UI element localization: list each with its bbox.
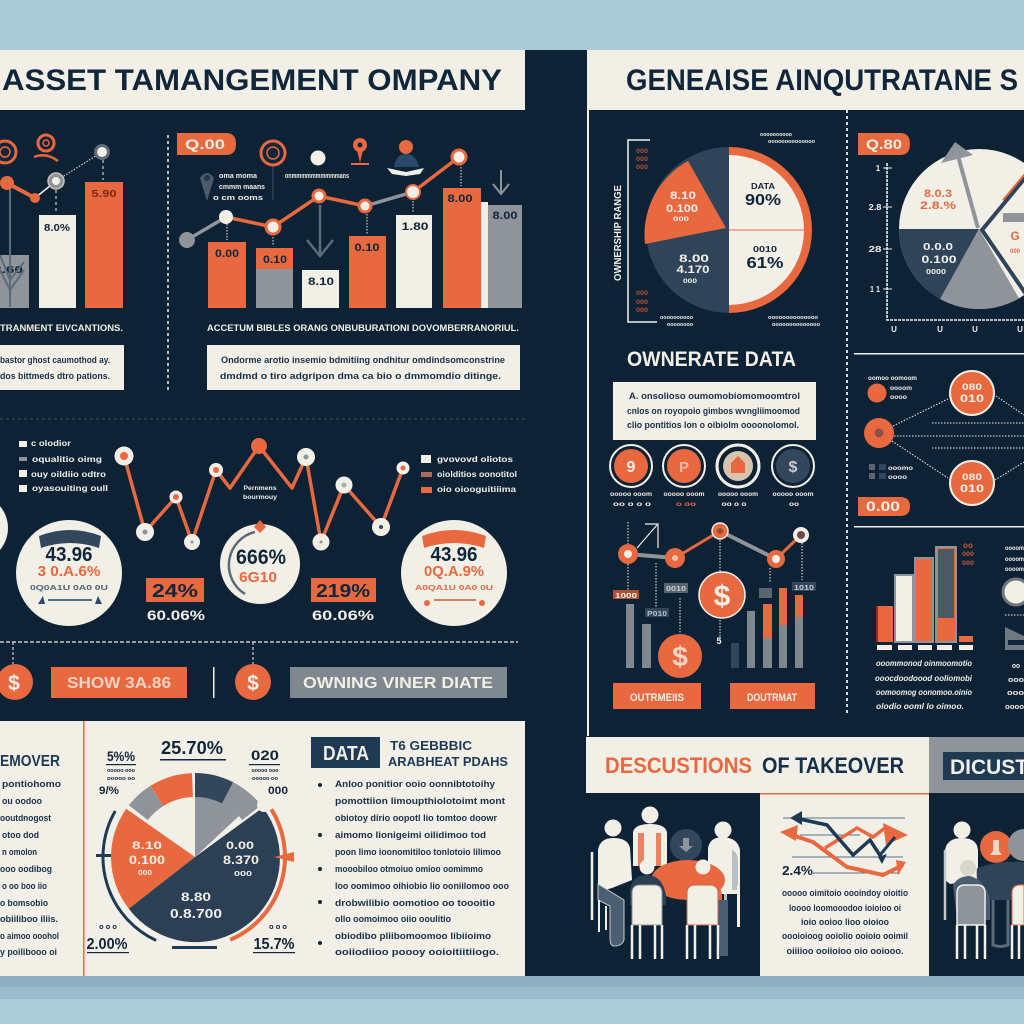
range labels: 000 — [636, 157, 649, 163]
chip — [177, 133, 236, 155]
network labels: oooom — [890, 385, 912, 392]
icon labels: o oo — [676, 502, 697, 508]
chip: Q.80 — [866, 136, 902, 152]
stat circle right: 0Q.A.9% — [424, 563, 484, 580]
text column: pontiohomo — [2, 779, 61, 790]
panel: bottom left takeover data — [0, 721, 525, 976]
icon: coin 3 — [717, 445, 759, 487]
description — [782, 888, 908, 957]
title: asset management company — [0, 50, 525, 110]
range labels: 000 — [636, 308, 649, 314]
arrow: up right — [637, 524, 658, 548]
small labels — [213, 173, 349, 202]
stat circle right — [401, 520, 507, 626]
text column: y poilibooo oi — [0, 947, 57, 958]
pie labels: 2.00% — [86, 936, 128, 953]
icon: map pin — [351, 138, 369, 165]
range labels — [636, 132, 820, 328]
chip: Q.00 — [185, 136, 225, 152]
bar series: 8.00 — [448, 193, 472, 205]
bullet list: obiodibo pliibomoomoo libiioimo — [335, 931, 491, 942]
icon: grey badge — [1008, 829, 1024, 861]
divider: dashed — [0, 641, 518, 643]
heading band: discussions of takeover: OF TAKEOVER — [762, 753, 904, 778]
icon: coin 4: $ — [789, 459, 798, 476]
icon: dollar lower — [658, 634, 702, 678]
title: generalise acquisition — [587, 50, 1024, 110]
axes: U — [1017, 325, 1023, 334]
title: asset management company: ASSET TAMANGEMENT OMPANY — [2, 64, 502, 97]
label: show — [51, 667, 187, 698]
pie chart — [644, 147, 812, 313]
stat circle left — [16, 520, 122, 626]
stat circle middle: 666% — [236, 546, 286, 569]
pie chart: 0.00 — [226, 840, 254, 852]
text box — [0, 345, 124, 390]
pie chart: 2.8.% — [920, 200, 956, 212]
pie labels: 000 — [268, 785, 288, 797]
icon: left coin — [0, 141, 16, 163]
button right: DOUTRMAT — [747, 692, 797, 704]
icon: dollar left: $ — [8, 672, 20, 695]
legend right: gvovovd oliotos — [437, 454, 513, 464]
pie chart: DATA — [751, 182, 775, 191]
icon labels: ooooo ooom — [610, 492, 652, 498]
text box: ownerate — [613, 382, 816, 440]
stat circle middle — [220, 520, 300, 604]
text column: o aimoo ooohol — [0, 931, 59, 942]
pie chart: 0.8.700 — [170, 906, 222, 921]
bar series: 8.10 — [308, 276, 334, 288]
icon: dollar right — [235, 642, 271, 700]
zigzag line chart: Pernmens — [244, 485, 277, 492]
chart: outlined bars: 000 — [962, 561, 975, 567]
bars: 8.0% — [44, 223, 70, 234]
text column — [0, 779, 61, 958]
pie chart: 61% — [746, 255, 784, 272]
text column: o oo boo iio — [2, 881, 47, 892]
bar series: 8.00 — [492, 210, 518, 222]
heading: data: T6 GEBBBIC — [390, 738, 473, 753]
pie chart: G — [1010, 229, 1020, 243]
person back centre — [633, 806, 667, 866]
node: bottom — [950, 461, 994, 505]
stat: percent right — [311, 578, 376, 623]
network labels: oooo — [890, 394, 907, 401]
pie labels: 15.7% — [254, 936, 294, 953]
range labels: 000 — [636, 291, 649, 297]
legend left: c olodior — [31, 438, 72, 448]
heading: data: ARABHEAT PDAHS — [388, 754, 508, 769]
label: show: SHOW 3A.86 — [67, 675, 171, 692]
pie chart: 0.100 — [922, 254, 956, 266]
stat: percent left: 60.06% — [147, 607, 206, 623]
bars — [626, 588, 803, 668]
panel: ownership pie — [613, 132, 820, 328]
connections — [892, 396, 1024, 480]
stat circle left: 43.96 — [46, 544, 92, 566]
label: data — [311, 737, 380, 768]
stat circle left: 3 0.A.6% — [38, 563, 100, 580]
side indicators right: oooo — [1005, 702, 1024, 711]
range labels: oooooooooo — [760, 132, 792, 138]
side indicators right: oo — [1012, 661, 1020, 670]
text: bar description: ooommonod oinmoomotio — [876, 658, 972, 668]
bullet list: ooiiodiioo poooy ooioitiitiiogo. — [335, 947, 499, 958]
text column: ou oodoo — [2, 796, 42, 807]
small labels: oma moma — [219, 173, 257, 180]
pie chart: 0.100 — [129, 853, 165, 867]
node: top: 080 — [962, 382, 982, 392]
icon: dollar left — [0, 642, 33, 700]
person back left — [592, 820, 632, 946]
legend dot — [868, 384, 886, 402]
panel: meeting illustration right — [945, 822, 1024, 959]
panel: main bar and line chart — [177, 133, 522, 390]
icon: dollar lower: $ — [672, 641, 688, 672]
axes: U — [937, 325, 943, 334]
text: bar description: oomoomog oonomoo.oinio — [876, 687, 972, 697]
pie chart: 000 — [673, 217, 690, 223]
person back — [945, 822, 978, 920]
pie chart: 8.80 — [181, 890, 211, 904]
legend left: oyasouiting oull — [32, 483, 108, 493]
chart: outlined bars: 000 — [962, 552, 975, 558]
strip: callouts — [0, 642, 507, 700]
pie labels: 5%% — [107, 748, 135, 764]
axes — [868, 163, 1024, 334]
bullet list: ollo oomoimoo oiio ooulitio — [335, 914, 451, 925]
bullet list: obiotoy dirio oopotl lio tomtoo doowr — [335, 813, 497, 824]
pie chart: 0.100 — [666, 203, 698, 215]
value: 2.4% — [782, 863, 813, 878]
text box — [207, 345, 520, 390]
heading: ownerate data: OWNERATE DATA — [627, 348, 796, 371]
heading: data — [388, 738, 508, 769]
dividers — [854, 353, 1024, 528]
network labels: ooomo — [888, 465, 913, 472]
range labels: oooooooooooooo — [768, 315, 818, 321]
description: ooooo oimitoio oooindoy oioitio — [782, 888, 908, 899]
stat: percent right: 219% — [316, 581, 370, 601]
text: bar description: ooocdoodoood ooliomobi — [875, 673, 973, 683]
pie chart: 000 — [234, 871, 252, 878]
icon: orange badge — [980, 831, 1012, 863]
heading band: discussions of takeover: DESCUSTIONS — [605, 753, 752, 778]
icon labels: ooooo ooom — [772, 492, 814, 498]
label: data: DATA — [323, 743, 369, 765]
pie labels: 25.70% — [161, 738, 223, 758]
icon labels: oo — [789, 502, 799, 508]
pie labels: 020 — [251, 747, 279, 763]
stat: percent left — [146, 578, 206, 623]
pie chart: 90% — [745, 192, 781, 209]
person front left with chair — [630, 860, 666, 959]
icons: four coins — [610, 445, 814, 508]
divider: horizontal — [0, 418, 525, 420]
pie chart: 4.170 — [676, 264, 710, 276]
arrow: down centre — [307, 205, 333, 256]
pie chart: 8.370 — [223, 853, 259, 867]
icon: coin 4 — [772, 445, 814, 487]
table — [977, 862, 1024, 900]
chart: outlined bars: 00 — [963, 544, 974, 550]
range labels: 000 — [636, 149, 649, 155]
connectors — [628, 522, 802, 640]
range labels: oooooooooo — [660, 315, 693, 321]
icon: grey pin — [200, 173, 214, 201]
arrow: orange rising — [825, 823, 908, 848]
bullet list: poon limo ioonomitiloo tonlotoio lilimoo — [335, 847, 501, 858]
pie labels — [86, 738, 295, 953]
panel: left bar and line chart — [0, 135, 124, 390]
pie labels: ooooo ooo — [107, 768, 136, 774]
pie chart: 0000 — [926, 269, 946, 276]
stat circle right: A0QA1U 0A0 0U — [415, 583, 493, 592]
axes: 1 1 — [870, 285, 880, 294]
range labels: oooooooo — [667, 322, 693, 328]
panel: axis pie — [858, 133, 1024, 334]
icon: coin 1 — [610, 445, 652, 487]
arrow: navy — [790, 811, 895, 864]
bullet list: loo oomimoo oihiobio lio ooniilomoo ooo — [335, 881, 509, 892]
text column: obiiliboo iliis. — [0, 914, 58, 925]
bullet list: mooobiloo otmoiuo omioo oomimmo — [335, 864, 483, 875]
bar series — [208, 188, 522, 308]
small labels: onmmmmmmmmmmans — [285, 173, 349, 180]
line with nodes — [0, 144, 110, 307]
node: bottom: 080 — [962, 472, 982, 482]
pie chart: 8.10 — [670, 190, 696, 202]
chart: outlined bars — [876, 544, 975, 650]
button left: OUTRMEIIS — [630, 692, 684, 704]
panel: right dark frame — [587, 110, 589, 736]
left sliver circle — [0, 494, 8, 562]
stat circle middle: 6G10 — [239, 569, 277, 586]
text box: ownerate: clio pontitios lon o oibiolm oooonolomol. — [627, 420, 799, 431]
divider: vertical dashed — [167, 135, 169, 390]
bullet list: aimomo lionigeimi oilidimoo tod — [335, 830, 486, 841]
node: top: 010 — [960, 393, 984, 405]
legend right: oio oiooguitiiima — [437, 484, 516, 494]
icon labels: oo o o o — [613, 502, 652, 508]
side indicators right — [1003, 545, 1024, 711]
line chart — [179, 150, 466, 248]
stat: percent left: 24% — [152, 581, 198, 601]
person front right with chair — [687, 860, 722, 959]
bracket — [628, 140, 657, 322]
pie chart: 8.10 — [132, 840, 162, 852]
side indicators right: ooo — [1008, 675, 1024, 684]
pie chart: 8.0.3 — [924, 188, 952, 200]
text column: otoo dod — [2, 830, 39, 841]
icon labels: ooooo ooom — [664, 492, 704, 498]
value tags: 1010 — [794, 583, 814, 592]
range labels: oooooooooooooo — [768, 139, 815, 145]
pie labels: ooooo ooo — [252, 768, 279, 774]
value tags: P010 — [647, 609, 667, 618]
table — [651, 860, 725, 900]
node: top — [950, 371, 994, 415]
text box: ownerate: cnlos on royopoio gimbos wvngliimoomod — [627, 406, 800, 417]
pie labels: 9/% — [99, 785, 119, 797]
small labels: cmmm maans — [219, 184, 265, 191]
divider: vertical dashed right — [846, 110, 848, 714]
legend left: oqualitio oimg — [32, 454, 102, 464]
axes: 2.8 — [868, 203, 882, 212]
text column: n omolon — [2, 847, 37, 858]
text box: dmdmd o tiro adgripon dma ca bio o dmmomdio ditinge. — [220, 371, 501, 382]
bar series: 1.80 — [402, 221, 428, 233]
icon: dollar right: $ — [247, 672, 259, 695]
pie labels: ooooo oo — [107, 776, 136, 782]
node: left — [864, 418, 894, 448]
pie chart: 000 — [1010, 249, 1021, 255]
value tags — [613, 582, 816, 618]
label: owning: OWNING VINER DIATE — [303, 675, 493, 692]
icon: coin 2 — [663, 445, 705, 487]
chart: line with bars and dollars — [613, 522, 816, 709]
arrow: down right — [493, 170, 509, 194]
button right — [730, 683, 815, 709]
bullet list: drobwilibio oomotioo oo toooitio — [335, 898, 495, 909]
icon: target pin — [34, 135, 58, 161]
chip — [858, 133, 910, 155]
pie labels: o o o — [99, 924, 117, 931]
label: owning — [290, 667, 507, 698]
icon: coin 1: 9 — [627, 459, 636, 476]
chart: line with bars and dollars: 5 — [716, 636, 722, 646]
stat circle right: 43.96 — [430, 544, 478, 566]
chip: 0.00 — [866, 498, 900, 514]
axes: 1 — [876, 164, 881, 173]
small labels: o cm ooms — [213, 195, 263, 202]
text box: bastor ghost caumothod ay. — [0, 355, 110, 366]
line — [618, 523, 809, 568]
network labels: oomoo oomoom — [868, 375, 917, 382]
bar series: 0.00 — [215, 248, 239, 260]
icon labels — [610, 492, 814, 508]
chair right — [1012, 885, 1024, 959]
icon labels: oo o o — [722, 502, 747, 508]
panel: trend chart card — [760, 793, 929, 976]
zigzag line chart — [114, 438, 410, 550]
caption: ACCETUM BIBLES ORANG ONBUBURATIONI DOVOMBERRANORIUL. — [207, 323, 519, 334]
icon: dollar upper: $ — [714, 580, 731, 613]
icon: coin 2: P — [679, 459, 689, 476]
legend left — [19, 438, 108, 493]
panel: distribution — [0, 438, 517, 626]
axes: U — [972, 325, 978, 334]
icon: badge circle — [670, 829, 702, 861]
legend left: ouy oildiio odtro — [31, 469, 106, 479]
heading fragment: EMOVER — [0, 753, 60, 770]
pie chart — [96, 773, 294, 949]
pie chart: 8.00 — [679, 253, 709, 265]
zigzag line chart: bourmouy — [243, 494, 277, 501]
text column: ooutdnogost — [0, 813, 52, 824]
bar series: 0.10 — [263, 254, 287, 266]
pie labels: o o o — [269, 924, 287, 931]
icon: presenter with book — [387, 140, 424, 176]
value tags: 0010 — [666, 584, 686, 593]
range labels: 000 — [636, 165, 649, 171]
stat circle left: 0Q0A1U 0A0 0U — [30, 583, 108, 592]
diagram: network — [858, 371, 1024, 516]
value tags: 1000 — [615, 591, 637, 600]
axes: U — [891, 325, 897, 334]
network labels: oooo — [888, 474, 907, 481]
panel: meeting illustration left — [592, 806, 740, 959]
bar series: 0.10 — [354, 242, 380, 254]
text box: ownerate: A. onsolioso oumomobiomomoomtrol — [629, 391, 800, 402]
description: ioio ooioo lioo oioioo — [801, 917, 889, 928]
range labels: oooooooooooooo — [772, 322, 820, 328]
range labels: 000 — [636, 300, 649, 306]
node: bottom: 010 — [960, 483, 984, 495]
side indicators right: ooo — [1007, 688, 1024, 697]
heading band: dicust — [929, 737, 1024, 793]
axes: 28 — [868, 245, 882, 254]
pie labels: ooooo oo — [252, 776, 279, 782]
arrow: orange falling — [780, 825, 906, 875]
legend right — [421, 454, 517, 494]
description: loooo loomooodoo ioioioo oi — [789, 903, 901, 914]
text: bar description: olodio ooml lo oimoo. — [876, 701, 964, 711]
bars — [0, 182, 123, 308]
stat: percent right: 60.06% — [312, 607, 375, 623]
pie chart: 000 — [683, 279, 698, 285]
bullet list: pomottiion limoupthiolotoimt mont — [335, 796, 506, 807]
icon: globe coin — [261, 141, 285, 200]
bullet list: Anloo ponitior ooio oonnibtotoihy — [335, 779, 496, 790]
pie chart: 000 — [138, 870, 152, 877]
pie chart: 0.0.0 — [923, 242, 954, 253]
person front with chair — [953, 860, 1008, 959]
chart lines — [783, 818, 905, 873]
network labels — [868, 375, 917, 481]
heading band: discussions of takeover — [586, 737, 929, 793]
text box: dos bittmeds dtro pations. — [0, 371, 110, 382]
text column: ooo oodibog — [0, 864, 52, 875]
icon labels: ooooo ooom — [718, 492, 758, 498]
icon: white dot — [310, 150, 326, 166]
icon: dollar upper — [699, 572, 745, 618]
chip — [858, 497, 910, 516]
text: bar description — [875, 658, 973, 711]
button left — [613, 683, 701, 709]
text column: o bomsobio — [0, 898, 48, 909]
caption: TRANMENT EIVCANTIONS. — [0, 323, 123, 334]
description: oiiiioo ooiioioo oio ooiooo. — [786, 946, 904, 957]
bullet list — [318, 779, 509, 958]
description: oooioioog ooiolio ooioio ooimil — [782, 931, 908, 942]
legend right: oiolditios oonotitol — [437, 469, 517, 479]
pie chart: 0010 — [753, 245, 778, 254]
bars: 5.90 — [92, 189, 117, 200]
person back right — [708, 822, 740, 956]
axis label: OWNERSHIP RANGE — [613, 185, 624, 281]
text box: Ondorme arotio insemio bdmitiing ondhitur omdindsomconstrine — [221, 355, 505, 366]
pie chart — [899, 142, 1024, 309]
